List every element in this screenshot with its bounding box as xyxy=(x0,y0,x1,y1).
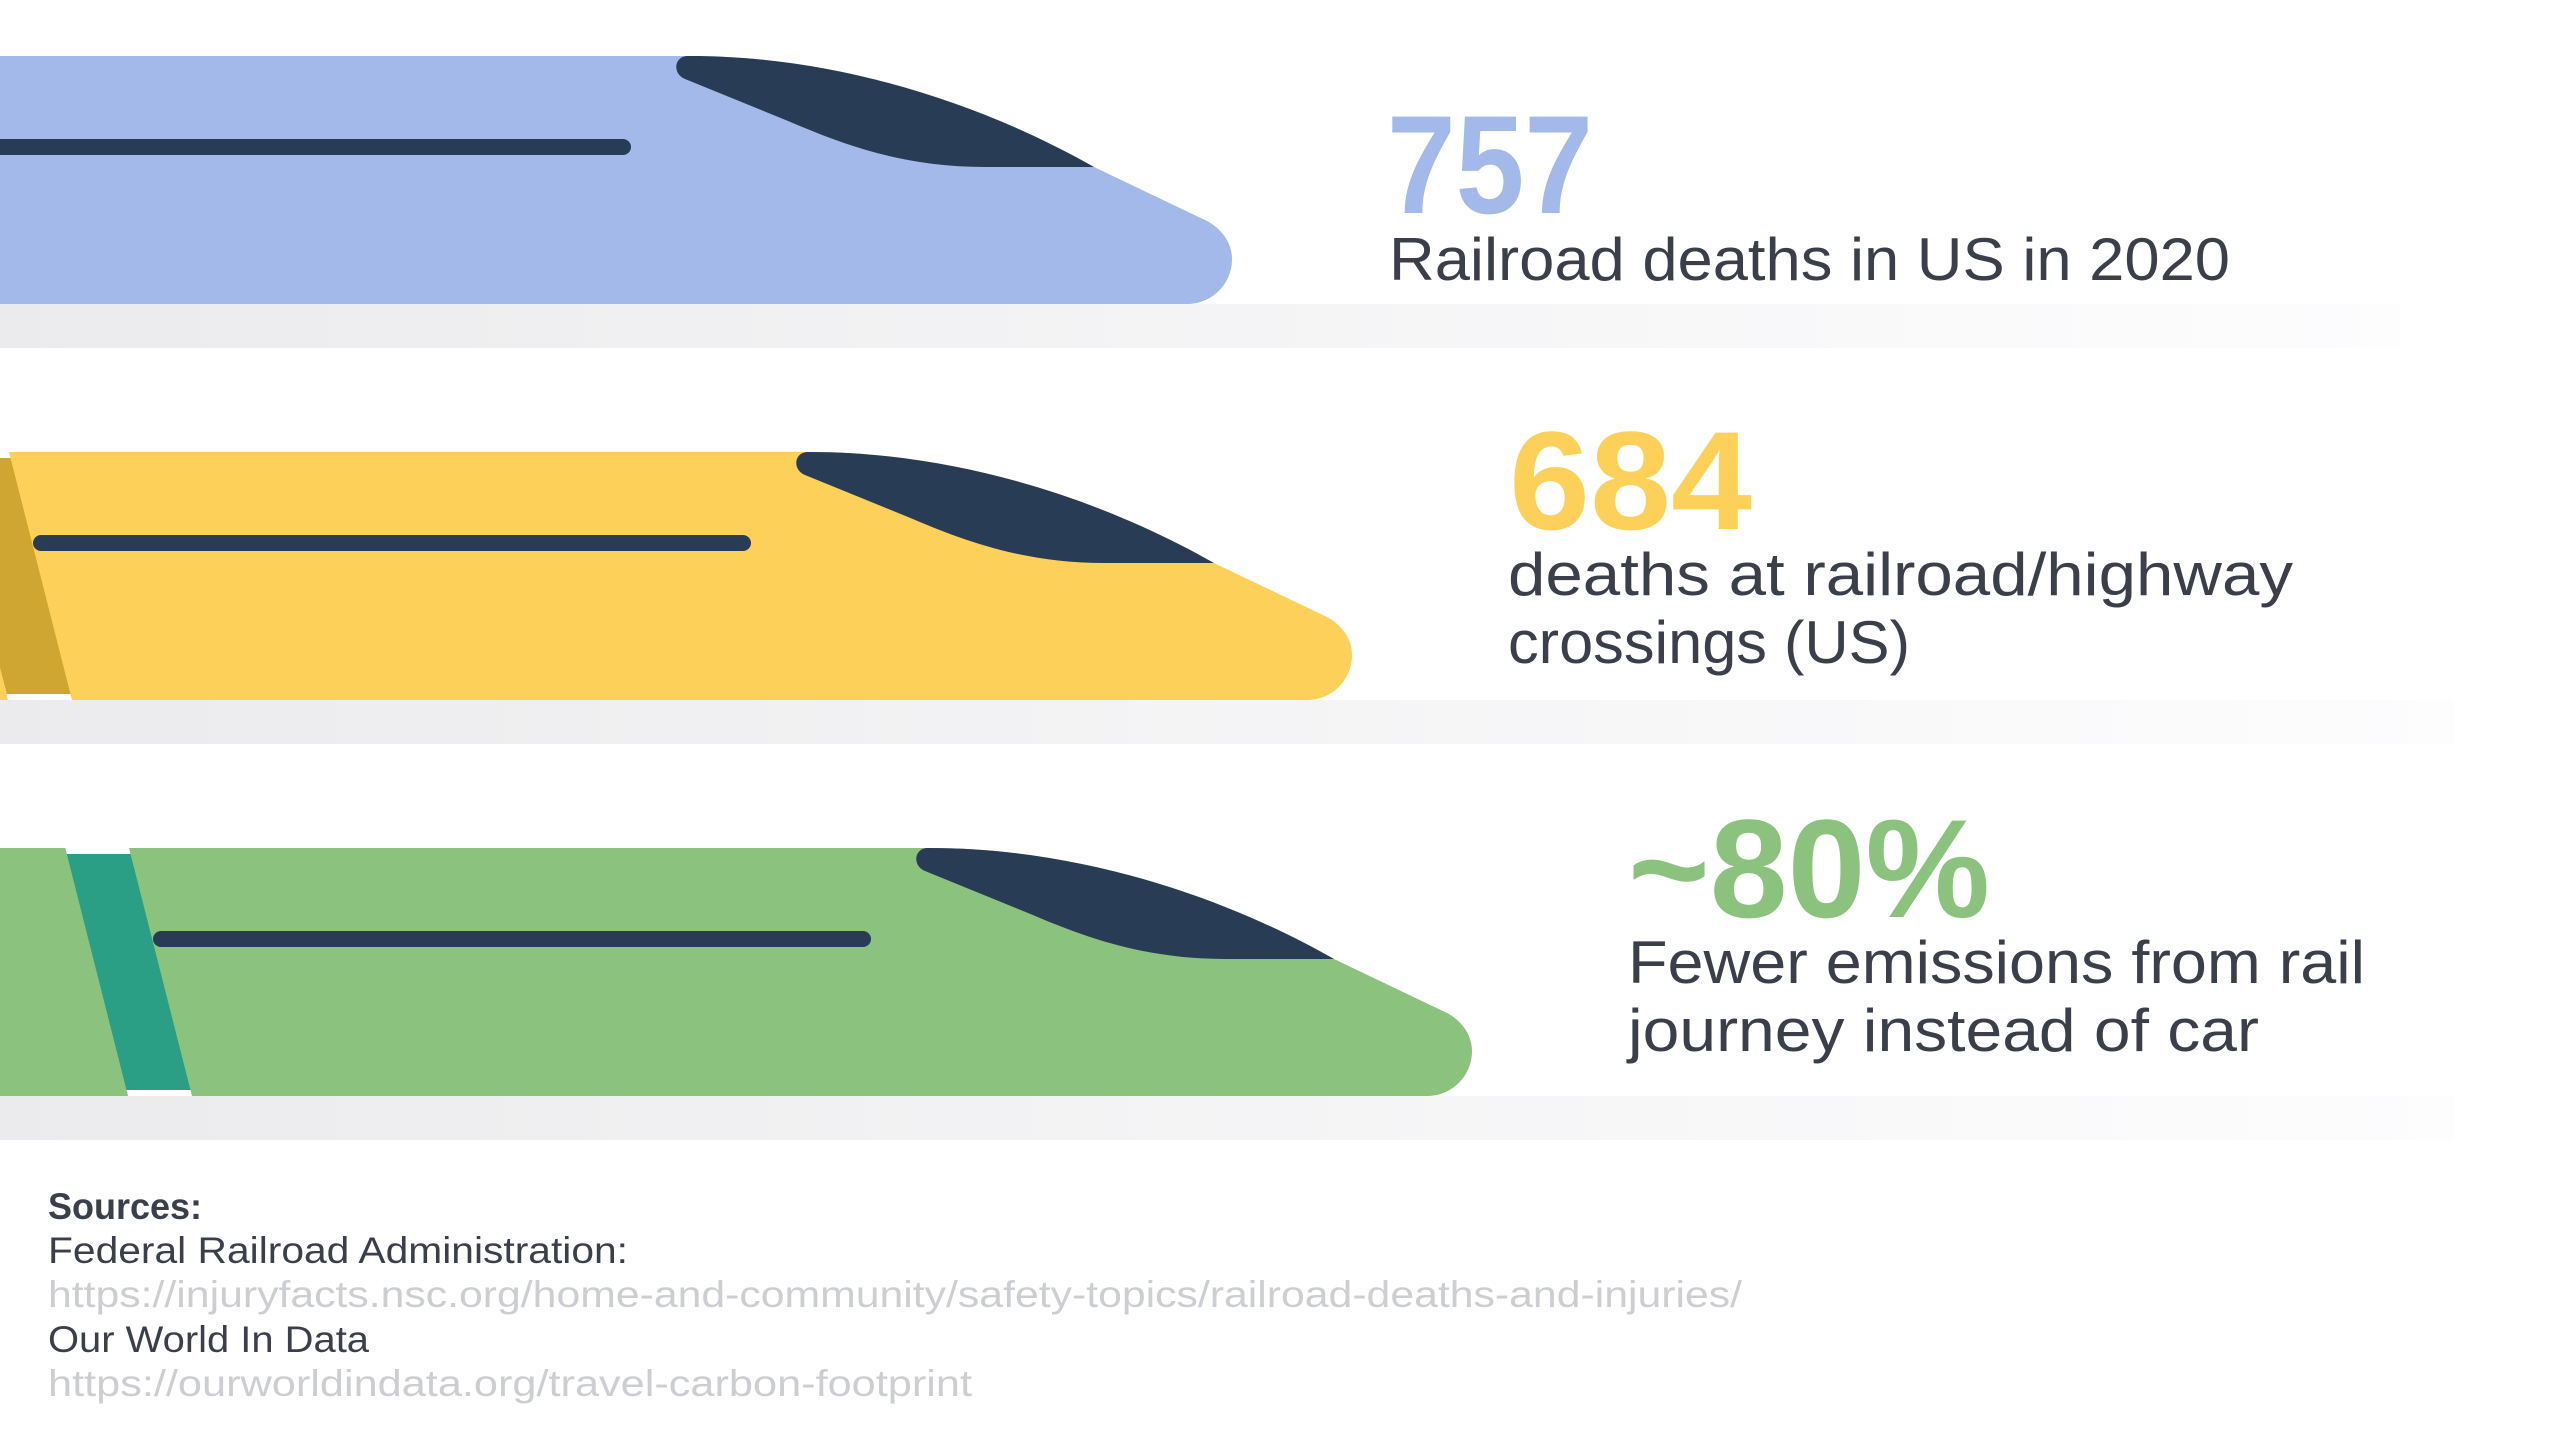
track: blue train xyxy=(0,304,2400,348)
icon: blue train xyxy=(0,56,1232,304)
sources heading: Sources: xyxy=(48,1186,202,1227)
label: deaths at crossings: crossings (US) xyxy=(1508,609,1910,676)
label: deaths at crossings xyxy=(1508,541,2293,676)
source link: our world in data: https://ourworldindata.org/travel-carbon-footprint xyxy=(48,1363,973,1404)
icon: yellow train xyxy=(0,452,1352,700)
icon: green train xyxy=(0,848,1472,1096)
source link: injury facts: https://injuryfacts.nsc.org/home-and-community/safety-topics/railroad-deaths-and-injuries/ xyxy=(48,1274,1743,1315)
label: fewer emissions xyxy=(1626,929,2365,1064)
label: deaths at crossings: deaths at railroad/highway xyxy=(1508,541,2293,608)
sources block xyxy=(48,1186,1743,1404)
stat: ~80%: ~80% xyxy=(1628,790,1990,947)
label: railroad deaths in US: Railroad deaths in US in 2020 xyxy=(1389,226,2230,293)
stat: 757: 757 xyxy=(1387,86,1593,243)
label: fewer emissions: Fewer emissions from rail xyxy=(1628,929,2365,996)
label: fewer emissions: journey instead of car xyxy=(1626,997,2259,1064)
source: Our World In Data: Our World In Data xyxy=(48,1319,369,1360)
source: Federal Railroad Administration: Federal Railroad Administration: xyxy=(48,1230,628,1271)
stat: 684: 684 xyxy=(1509,402,1752,559)
track: yellow train xyxy=(0,700,2454,744)
panel: fewer emissions xyxy=(0,790,2454,1140)
panel: crossing deaths xyxy=(0,402,2454,744)
panel: railroad deaths xyxy=(0,56,2400,348)
track: green train xyxy=(0,1096,2454,1140)
